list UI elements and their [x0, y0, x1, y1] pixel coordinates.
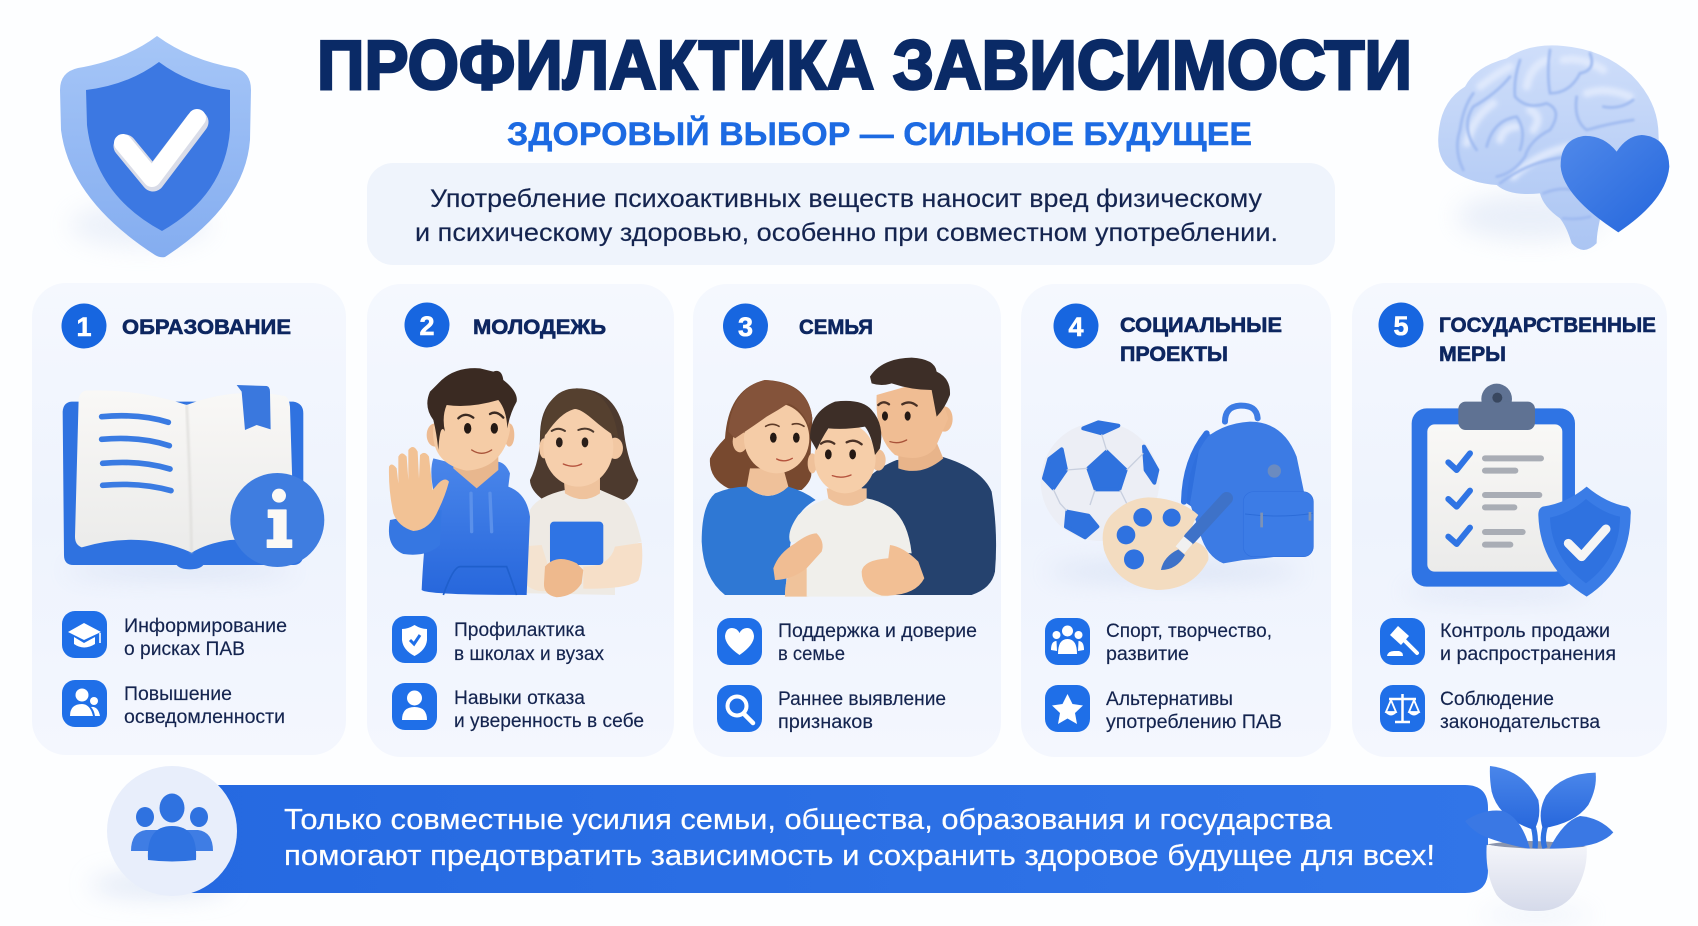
- text: [1106, 621, 1272, 665]
- icon: brain with heart: [1438, 45, 1669, 250]
- icon: star: [1045, 685, 1090, 732]
- text: [124, 684, 285, 728]
- list item: раннее выявление: [717, 685, 946, 733]
- text: осведомленности: [124, 707, 285, 728]
- number badge 4: 4: [1068, 312, 1084, 342]
- number badge 5: 5: [1393, 311, 1409, 341]
- text: Профилактика: [454, 620, 585, 641]
- icon: magnifier: [717, 685, 762, 732]
- callout banner: [190, 785, 1488, 893]
- banner text: помогают предотвратить зависимость и сохранить здоровое будущее для всех!: [284, 840, 1435, 872]
- text: Раннее выявление: [778, 689, 946, 710]
- number badge 1: 1: [76, 312, 92, 342]
- banner text: [284, 804, 1435, 872]
- text: [1440, 621, 1616, 665]
- number badge 2: 2: [419, 311, 435, 341]
- text: [778, 621, 977, 665]
- text: [1106, 689, 1282, 733]
- heading: молодежь: МОЛОДЕЖЬ: [473, 316, 606, 339]
- illustration: clipboard with shield: [1403, 384, 1631, 598]
- icon: potted plant: [1465, 766, 1613, 920]
- text: употреблению ПАВ: [1106, 712, 1282, 733]
- panel: социальные проекты: [1021, 284, 1331, 757]
- icon: heart: [717, 618, 762, 665]
- panel: семья: [693, 284, 1001, 757]
- list item: альтернативы: [1045, 685, 1282, 733]
- text: Повышение: [124, 684, 232, 705]
- text: [454, 688, 644, 732]
- number badge 2: [404, 302, 450, 348]
- list item: соблюдение законодательства: [1380, 685, 1600, 733]
- heading: государственные меры: ГОСУДАРСТВЕННЫЕ: [1439, 314, 1656, 337]
- list item: поддержка: [717, 618, 977, 665]
- list item: контроль продажи: [1380, 618, 1616, 665]
- illustration: ball, palette, backpack: [1041, 406, 1313, 590]
- intro text: и психическому здоровью, особенно при совместном употреблении.: [415, 219, 1278, 247]
- text: [454, 620, 604, 665]
- illustration: teenagers: [389, 368, 642, 597]
- list item: навыки отказа: [392, 683, 644, 732]
- icon: group: [1045, 618, 1090, 665]
- text: о рисках ПАВ: [124, 639, 245, 660]
- icon: graduation cap: [62, 611, 107, 658]
- list item: профилактика: [392, 616, 604, 665]
- list item: спорт: [1045, 618, 1272, 665]
- text: и распространения: [1440, 644, 1616, 665]
- heading: образование: ОБРАЗОВАНИЕ: [122, 316, 291, 339]
- subtitle: ЗДОРОВЫЙ ВЫБОР — СИЛЬНОЕ БУДУЩЕЕ: [507, 116, 1252, 152]
- text: Альтернативы: [1106, 689, 1233, 710]
- icon: people: [62, 680, 107, 727]
- number badge 3: [723, 304, 768, 348]
- text: в школах и вузах: [454, 644, 604, 665]
- illustration: open book with info badge: [63, 385, 324, 577]
- text: [124, 616, 287, 660]
- number badge 5: [1378, 302, 1424, 348]
- illustration: family: [702, 358, 996, 597]
- icon: gavel: [1380, 618, 1425, 665]
- text: [778, 689, 946, 733]
- title: ПРОФИЛАКТИКА ЗАВИСИМОСТИ: [317, 26, 1412, 104]
- text: Соблюдение: [1440, 689, 1554, 710]
- intro text: [415, 185, 1278, 247]
- intro text: Употребление психоактивных веществ наносит вред физическому: [430, 185, 1263, 213]
- intro panel: [367, 163, 1335, 265]
- icon: shield: [392, 616, 437, 663]
- heading: государственные меры: МЕРЫ: [1439, 343, 1506, 366]
- number badge 3: 3: [738, 312, 753, 342]
- panel: образование: [32, 283, 346, 755]
- text: законодательства: [1440, 712, 1600, 733]
- number badge 4: [1054, 304, 1098, 348]
- icon: scales: [1380, 685, 1425, 732]
- heading: социальные проекты: ПРОЕКТЫ: [1120, 343, 1228, 366]
- text: Контроль продажи: [1440, 621, 1610, 642]
- heading: социальные проекты: [1120, 314, 1282, 366]
- text: в семье: [778, 644, 845, 665]
- banner text: Только совместные усилия семьи, общества, образования и государства: [284, 804, 1333, 836]
- list item: повышение осведомленности: [62, 680, 285, 728]
- panel: государственные меры: [1352, 283, 1667, 757]
- text: Информирование: [124, 616, 287, 637]
- icon: people circle: [107, 766, 237, 896]
- text: развитие: [1106, 644, 1189, 665]
- heading: семья: СЕМЬЯ: [799, 316, 873, 339]
- heading: государственные меры: [1439, 314, 1656, 366]
- number badge 1: [62, 304, 106, 348]
- text: и уверенность в себе: [454, 711, 644, 732]
- icon: person: [392, 683, 437, 730]
- list item: информирование: [62, 611, 287, 660]
- text: Спорт, творчество,: [1106, 621, 1272, 642]
- text: признаков: [778, 712, 873, 733]
- icon: shield with check: [60, 36, 251, 257]
- panel: молодежь: [367, 284, 674, 757]
- text: Навыки отказа: [454, 688, 585, 709]
- heading: социальные проекты: СОЦИАЛЬНЫЕ: [1120, 314, 1282, 337]
- text: [1440, 689, 1600, 733]
- text: Поддержка и доверие: [778, 621, 977, 642]
